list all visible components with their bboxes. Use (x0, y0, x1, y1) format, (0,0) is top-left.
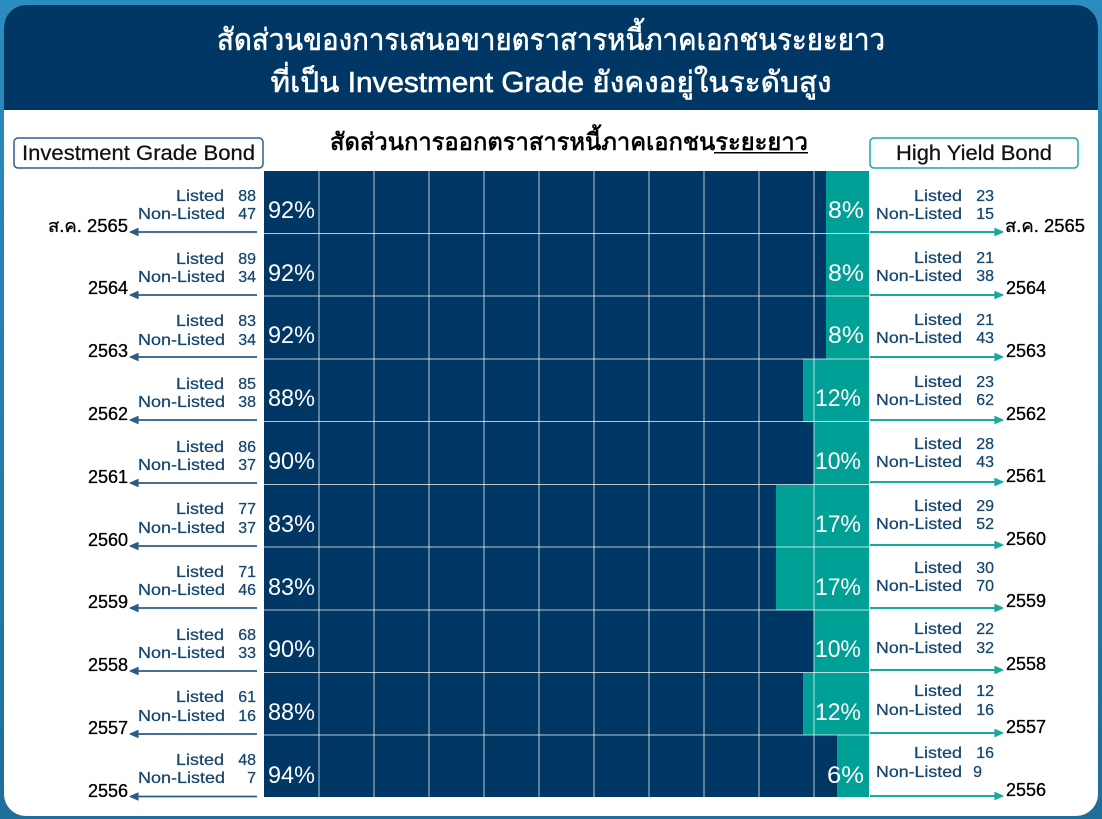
row: 2561: 2561 (1006, 466, 1046, 486)
row: 2564: 34 (238, 269, 256, 286)
row: 2563: Non-Listed (138, 332, 225, 349)
legend: Investment Grade Bond (14, 138, 263, 168)
row: ส.ค. 2565: Non-Listed (138, 206, 225, 223)
row: 2556: 2556 (88, 781, 128, 801)
row: 2557: 2557 (1006, 717, 1046, 737)
row: 2560: 77 (238, 501, 256, 518)
row: 2559 (88, 564, 257, 612)
stacked bar chart (264, 171, 869, 797)
row: 2559: 30 (976, 560, 994, 577)
row: 2560: Listed (914, 498, 962, 515)
row: 2564: Listed (176, 251, 224, 268)
row: 2562: 38 (238, 394, 256, 411)
row: ส.ค. 2565: Listed (914, 188, 962, 205)
percentage labels: 88% (268, 699, 315, 726)
percentage labels: 83% (268, 511, 315, 538)
row: 2558: 68 (238, 627, 256, 644)
row: 2559: 71 (238, 564, 256, 581)
row: 2556: 2556 (1006, 780, 1046, 800)
row: 2556: 7 (247, 770, 256, 787)
row: 2560: Listed (176, 501, 224, 518)
row: 2562: 2562 (88, 404, 128, 424)
row: 2561: 86 (238, 439, 256, 456)
row: 2557: 2557 (88, 718, 128, 738)
row: 2564: 89 (238, 251, 256, 268)
row: 2558: Non-Listed (876, 640, 962, 657)
row: ส.ค. 2565: Non-Listed (876, 206, 962, 223)
row: 2557: 12 (976, 683, 994, 700)
high yield bars (776, 171, 869, 797)
row: 2558: 2558 (1006, 654, 1046, 674)
row: 2556: Listed (176, 752, 224, 769)
row: 2556: Non-Listed (876, 764, 962, 781)
row: 2561: Non-Listed (138, 457, 225, 474)
row: 2556 (870, 745, 1046, 800)
row: 2561 (870, 436, 1046, 486)
percentage labels: 10% (815, 448, 861, 475)
row: 2557: 16 (238, 708, 256, 725)
percentage labels: 92% (268, 260, 315, 287)
row: 2558: 2558 (88, 655, 128, 675)
right column: high yield counts by year (870, 188, 1085, 800)
title banner: ที่เป็น Investment Grade ยังคงอยู่ในระดับสูง (270, 62, 832, 100)
title banner (4, 5, 1098, 110)
row: 2562 (88, 376, 257, 424)
row: 2558 (88, 627, 257, 675)
row: 2556: Listed (914, 745, 962, 762)
percentage labels: 6% (827, 762, 864, 789)
legend: High Yield Bond: High Yield Bond (896, 142, 1052, 165)
percentage labels: 92% (268, 197, 315, 224)
row: 2564: 2564 (1006, 278, 1046, 298)
row: 2560: 2560 (1006, 529, 1046, 549)
row: 2559: 2559 (1006, 591, 1046, 611)
row: 2558 (870, 621, 1046, 674)
row: 2556: 9 (973, 764, 982, 781)
row: 2558: 33 (238, 645, 256, 662)
row: ส.ค. 2565: 15 (976, 206, 994, 223)
row: 2564: 2564 (88, 278, 128, 298)
row: 2557: Non-Listed (138, 708, 225, 725)
row: 2556: 48 (238, 752, 256, 769)
row: 2560: 37 (238, 520, 256, 537)
row: 2557: Listed (176, 689, 224, 706)
row: 2559: 46 (238, 582, 256, 599)
row: ส.ค. 2565 (48, 188, 257, 236)
row: 2562: 2562 (1006, 404, 1046, 424)
row: 2559 (870, 560, 1046, 612)
row: 2562: 85 (238, 376, 256, 393)
investment grade bars (264, 171, 869, 797)
percentage labels: 8% (828, 260, 864, 287)
row: 2562: 23 (976, 374, 994, 391)
percentage labels: 83% (268, 574, 315, 601)
row: ส.ค. 2565: ส.ค. 2565 (48, 216, 128, 236)
row: 2561 (88, 439, 257, 487)
percentage labels (268, 197, 864, 789)
row: 2563: 21 (976, 312, 994, 329)
row: 2564: 38 (976, 268, 994, 285)
row: 2558: Non-Listed (138, 645, 225, 662)
row: 2563: Non-Listed (876, 330, 962, 347)
percentage labels: 8% (828, 197, 864, 224)
percentage labels: 92% (268, 322, 315, 349)
row: 2564: Non-Listed (876, 268, 962, 285)
percentage labels: 8% (828, 322, 864, 349)
row: 2560: Non-Listed (876, 516, 962, 533)
row: ส.ค. 2565: 88 (238, 188, 256, 205)
row: 2559: Listed (176, 564, 224, 581)
row: 2556: 16 (976, 745, 994, 762)
row: ส.ค. 2565: ส.ค. 2565 (1005, 216, 1085, 236)
percentage labels: 12% (815, 699, 861, 726)
percentage labels: 88% (268, 385, 315, 412)
row: 2561: Listed (914, 436, 962, 453)
row: 2558: 22 (976, 621, 994, 638)
row: 2562: Listed (914, 374, 962, 391)
row: 2563 (870, 312, 1046, 361)
row: 2564: 21 (976, 250, 994, 267)
row: 2559: Non-Listed (876, 578, 962, 595)
row: 2556: Non-Listed (138, 770, 225, 787)
row: 2563: 43 (976, 330, 994, 347)
row: 2563 (88, 313, 257, 361)
row: 2557 (88, 689, 257, 738)
row: 2560: Non-Listed (138, 520, 225, 537)
row: 2562: 62 (976, 392, 994, 409)
percentage labels: 17% (815, 574, 861, 601)
row: 2562: Non-Listed (138, 394, 225, 411)
percentage labels: 10% (815, 636, 861, 663)
row: 2557: 16 (976, 702, 994, 719)
row: 2562: Listed (176, 376, 224, 393)
row: 2558: Listed (914, 621, 962, 638)
row: 2564: Listed (914, 250, 962, 267)
row: 2560: 52 (976, 516, 994, 533)
legend: High Yield Bond (870, 138, 1078, 168)
row: 2558: 32 (976, 640, 994, 657)
row: 2561: 2561 (88, 467, 128, 487)
row: 2564: Non-Listed (138, 269, 225, 286)
row: 2559: 70 (976, 578, 994, 595)
row: 2564 (88, 251, 257, 298)
row: 2561: 43 (976, 454, 994, 471)
row: ส.ค. 2565: 47 (238, 206, 256, 223)
percentage labels: 90% (268, 636, 315, 663)
chart heading: สัดส่วนการออกตราสารหนี้ภาคเอกชนระยะยาว (330, 124, 808, 156)
legend: Investment Grade Bond: Investment Grade Bond (22, 142, 255, 165)
row: ส.ค. 2565 (870, 188, 1085, 236)
row: 2560 (88, 501, 257, 550)
row: 2560: 2560 (88, 530, 128, 550)
row: 2563: 2563 (88, 341, 128, 361)
row: 2561: 37 (238, 457, 256, 474)
percentage labels: 12% (815, 385, 861, 412)
title banner: สัดส่วนของการเสนอขายตราสารหนี้ภาคเอกชนระยะยาว (217, 18, 885, 57)
row: 2563: Listed (914, 312, 962, 329)
row: ส.ค. 2565: 23 (976, 188, 994, 205)
row: 2557: Non-Listed (876, 702, 962, 719)
percentage labels: 94% (268, 762, 315, 789)
row: 2564 (870, 250, 1046, 298)
row: ส.ค. 2565: Listed (176, 188, 224, 205)
row: 2560 (870, 498, 1046, 549)
row: 2563: 34 (238, 332, 256, 349)
row: 2557: Listed (914, 683, 962, 700)
row: 2557: 61 (238, 689, 256, 706)
row: 2563: 2563 (1006, 341, 1046, 361)
row: 2557 (870, 683, 1046, 737)
row: 2562 (870, 374, 1046, 424)
row: 2559: Non-Listed (138, 582, 225, 599)
left column: investment grade counts by year (48, 188, 257, 801)
row: 2563: 83 (238, 313, 256, 330)
row: 2556 (88, 752, 257, 801)
row: 2559: Listed (914, 560, 962, 577)
row: 2563: Listed (176, 313, 224, 330)
percentage labels: 90% (268, 448, 315, 475)
row: 2560: 29 (976, 498, 994, 515)
row: 2561: Non-Listed (876, 454, 962, 471)
row: 2561: Listed (176, 439, 224, 456)
row: 2558: Listed (176, 627, 224, 644)
row: 2559: 2559 (88, 592, 128, 612)
row: 2562: Non-Listed (876, 392, 962, 409)
percentage labels: 17% (815, 511, 861, 538)
row: 2561: 28 (976, 436, 994, 453)
